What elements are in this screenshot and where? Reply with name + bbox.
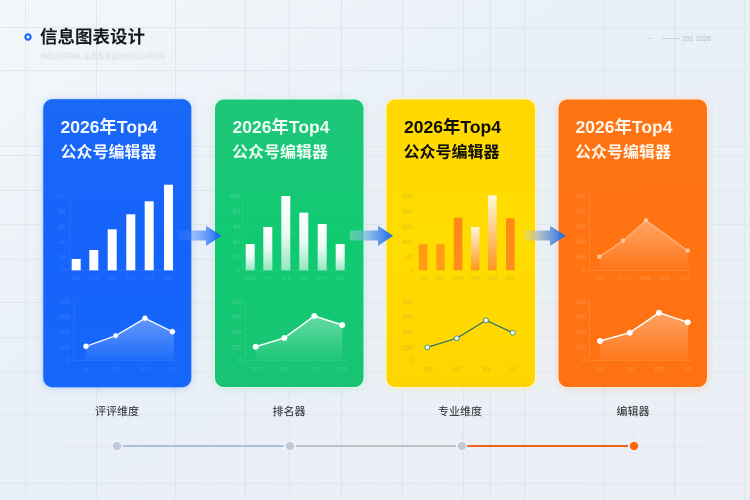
bar chart: N/2 — [72, 276, 80, 282]
area chart: 1/47 — [680, 276, 690, 282]
bar chart: 263 — [505, 276, 515, 282]
line chart: 200 — [231, 330, 242, 336]
line chart: 100 — [59, 299, 70, 306]
header — [25, 27, 165, 61]
line chart: 5/0 — [597, 367, 605, 373]
icon: title bullet — [25, 34, 31, 40]
area chart: 0 — [582, 268, 586, 275]
line chart: 150 — [402, 344, 413, 352]
step labels: 编辑器 — [616, 404, 650, 418]
bar chart: 0 — [62, 268, 66, 275]
line chart: 4ct — [82, 367, 90, 373]
line chart: 300 — [452, 367, 462, 373]
line chart: 300 — [59, 330, 70, 336]
line chart: 100 — [231, 299, 242, 306]
bar chart: 40 — [59, 239, 66, 246]
bar chart: 460 — [402, 208, 413, 216]
line chart — [231, 299, 347, 373]
line chart: 561 — [424, 367, 434, 373]
bar chart: 1/78 — [317, 276, 327, 282]
arrow: blue to green — [178, 226, 222, 246]
line chart: 160 — [575, 299, 586, 306]
bar chart: 0 — [236, 268, 240, 275]
bar chart: 20 — [406, 254, 413, 261]
line chart — [575, 299, 692, 373]
bar chart: 10 — [233, 254, 240, 261]
bar chart: 1/1 — [419, 276, 427, 282]
heading: 公众号编辑器 — [232, 142, 328, 162]
line chart: 5/3 — [169, 367, 177, 373]
area chart: 600 — [575, 224, 586, 231]
bar chart: 1/34 — [453, 276, 463, 282]
bar chart: 4/7 — [264, 276, 272, 282]
line chart: 5/1 — [510, 367, 518, 373]
line chart: 3/8 — [626, 367, 634, 373]
area chart: 1/32 — [660, 276, 670, 282]
line chart: 0 — [409, 358, 413, 364]
bar chart: 2/U — [336, 276, 344, 282]
line chart: 300 — [575, 314, 586, 321]
line chart: 160 — [402, 299, 413, 306]
date tag — [648, 36, 711, 43]
line chart: 0 — [66, 358, 70, 364]
bar chart: 40 — [233, 224, 240, 231]
line chart: 383 — [110, 367, 120, 373]
bar chart: B/4 — [108, 276, 116, 282]
bar chart: 10/2 — [245, 276, 255, 282]
area chart: 150 — [575, 254, 586, 261]
bar chart: 100 — [229, 193, 240, 200]
timeline — [60, 430, 708, 451]
area chart: 600 — [575, 208, 586, 216]
bar chart: B/4 — [300, 276, 308, 282]
area chart: 1/1/4 — [618, 276, 630, 282]
arrow: yellow to orange — [525, 226, 566, 246]
line chart — [59, 299, 178, 373]
panel: green card — [214, 99, 364, 389]
bar chart: 100 — [402, 193, 413, 200]
bar chart: 172 — [89, 276, 99, 282]
panel: yellow card — [386, 99, 536, 389]
bar chart: 500 — [402, 224, 413, 231]
heading: 公众号编辑器 — [575, 142, 671, 162]
line chart: 3/1 — [253, 367, 261, 373]
line chart: 100 — [575, 344, 586, 352]
line chart: 3/E — [311, 367, 319, 373]
bar chart: 0 — [409, 268, 413, 275]
bar chart: 30 — [233, 239, 240, 246]
line chart: 300 — [231, 314, 242, 321]
bar chart — [402, 193, 515, 282]
line chart: 306 — [280, 367, 290, 373]
bar chart: 522 — [435, 276, 445, 282]
line chart: 100 — [59, 344, 70, 352]
bar chart: 100 — [55, 193, 66, 200]
step labels — [95, 404, 650, 418]
date tag: 201 2026 — [682, 36, 711, 43]
step labels: 专业维度 — [438, 404, 482, 418]
step labels: 评评维度 — [95, 404, 139, 418]
heading: 2026年Top4 — [60, 117, 158, 137]
heading: 2026年Top4 — [404, 117, 501, 137]
area chart: 8/04 — [640, 276, 650, 282]
area chart — [575, 193, 690, 282]
panel: blue card — [42, 99, 192, 389]
bar chart: 20 — [59, 254, 66, 261]
bar chart: 163 — [144, 276, 154, 282]
bar chart: 400 — [402, 239, 413, 246]
bar chart — [55, 185, 176, 282]
line chart: 5/9 — [339, 367, 347, 373]
area chart: 200 — [575, 239, 586, 246]
line chart: 0 — [238, 358, 242, 364]
bar chart: B/4 — [127, 276, 135, 282]
arrow: green to yellow — [350, 226, 393, 246]
bar chart: 260 — [163, 276, 173, 282]
area chart: 160 — [575, 193, 586, 200]
line chart: 150 — [231, 344, 242, 352]
bar chart — [229, 193, 348, 282]
line chart: 200 — [402, 330, 413, 336]
bar chart: 142 — [488, 276, 498, 282]
panel: orange card — [558, 99, 708, 389]
line chart: 3/3 — [482, 367, 490, 373]
heading: 2026年Top4 — [576, 117, 673, 137]
line chart: 5/9 — [684, 367, 692, 373]
bar chart: 60 — [233, 208, 240, 216]
title: 信息图表设计 — [40, 27, 145, 47]
heading: 2026年Top4 — [232, 117, 330, 137]
bar chart: B/4 — [282, 276, 290, 282]
line chart: 0 — [582, 358, 586, 364]
line chart: 3E2 — [140, 367, 150, 373]
heading: 公众号编辑器 — [404, 142, 500, 162]
line chart: 300 — [59, 314, 70, 321]
heading: 公众号编辑器 — [60, 142, 157, 162]
area chart: 461 — [596, 276, 606, 282]
bar chart: 80 — [59, 208, 66, 216]
bar chart: 348 — [470, 276, 480, 282]
bar chart: 60 — [59, 224, 66, 231]
line chart: 200 — [575, 330, 586, 336]
step labels: 排名器 — [272, 404, 306, 418]
subtitle: INDUSTRIAL 信息图表设计EDUCATION — [41, 51, 165, 61]
line chart: 1/80 — [654, 367, 664, 373]
line chart — [402, 299, 518, 373]
line chart: 350 — [402, 314, 413, 321]
